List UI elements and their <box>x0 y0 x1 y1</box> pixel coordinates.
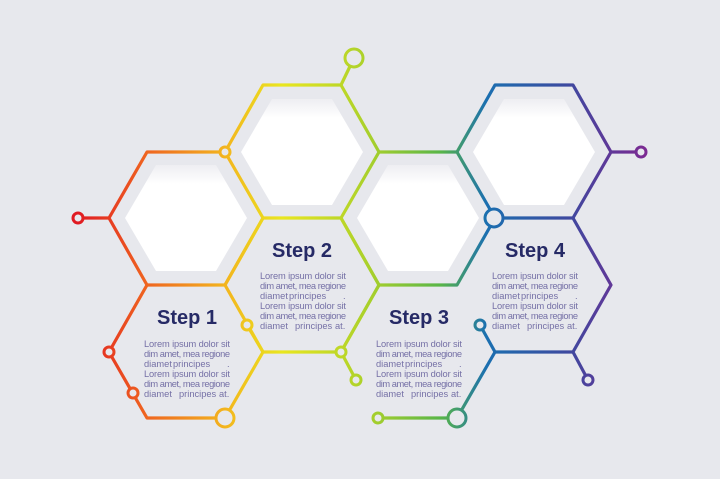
step 1 text: principes <box>179 389 217 399</box>
step 3 text: principes <box>405 359 443 369</box>
step 2 text: dim amet, mea regione <box>260 311 346 321</box>
step 3 text: Step 3 <box>389 307 449 329</box>
honeycomb outline connectors <box>78 58 641 418</box>
step 1 text <box>144 307 230 399</box>
step 2 text: principes <box>295 321 333 331</box>
step 3 text: dim amet, mea regione <box>376 379 462 389</box>
step 4 text: diamet <box>492 291 520 301</box>
step 2 text: diamet <box>260 321 288 331</box>
step 2 text: . <box>343 291 346 301</box>
step 3 text: diamet <box>376 389 404 399</box>
image placeholder hexagons <box>125 99 595 271</box>
step 4 text: principes <box>527 321 565 331</box>
step 4 text: Lorem ipsum dolor sit <box>492 271 578 281</box>
step 3 text <box>376 307 462 399</box>
step 1 text: diamet <box>144 359 172 369</box>
step 3 text: dim amet, mea regione <box>376 349 462 359</box>
step 1 text: at. <box>219 389 229 399</box>
step 1 text: principes <box>173 359 211 369</box>
step 3 text: diamet <box>376 359 404 369</box>
step 3 text: principes <box>411 389 449 399</box>
step 4 text: diamet <box>492 321 520 331</box>
step 4 text: principes <box>521 291 559 301</box>
step 2 text: at. <box>335 321 345 331</box>
step 1 text: dim amet, mea regione <box>144 379 230 389</box>
step 4 text: . <box>575 291 578 301</box>
step 3 text: Lorem ipsum dolor sit <box>376 369 462 379</box>
step 1 text: Lorem ipsum dolor sit <box>144 369 230 379</box>
step 2 text: diamet <box>260 291 288 301</box>
step 2 text: principes <box>289 291 327 301</box>
step 4 text: Step 4 <box>505 240 566 262</box>
step 3 text: . <box>459 359 462 369</box>
step 2 text: Lorem ipsum dolor sit <box>260 271 346 281</box>
step 1 text: Lorem ipsum dolor sit <box>144 339 230 349</box>
step 4 text: at. <box>567 321 577 331</box>
step 4 text <box>492 240 578 331</box>
step 4 text: dim amet, mea regione <box>492 281 578 291</box>
step 1 text: dim amet, mea regione <box>144 349 230 359</box>
step 1 text: diamet <box>144 389 172 399</box>
connector circles <box>73 49 646 427</box>
step 4 text: Lorem ipsum dolor sit <box>492 301 578 311</box>
step 1 text: . <box>227 359 230 369</box>
step 1 text: Step 1 <box>157 307 217 329</box>
step 2 text: dim amet, mea regione <box>260 281 346 291</box>
step 2 text <box>260 240 346 331</box>
step 2 text: Step 2 <box>272 240 332 262</box>
step 3 text: Lorem ipsum dolor sit <box>376 339 462 349</box>
step 3 text: at. <box>451 389 461 399</box>
step 4 text: dim amet, mea regione <box>492 311 578 321</box>
step 2 text: Lorem ipsum dolor sit <box>260 301 346 311</box>
